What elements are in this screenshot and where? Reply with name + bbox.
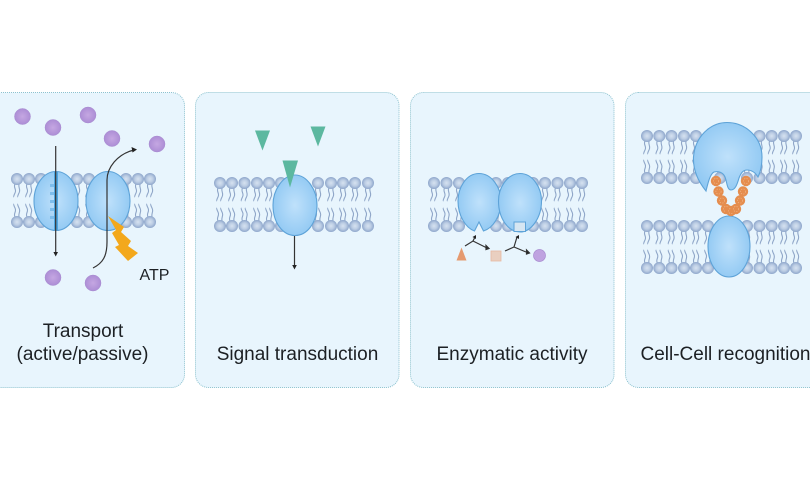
lipid bilayer: signal [214,177,374,232]
arrow: passive transport [53,146,58,256]
arrow: signal [292,236,297,270]
lipid bilayer: upper cell [641,130,802,184]
receptor: lower cell [708,216,750,277]
substrate triangle [456,248,466,260]
lipid bilayer: lower cell [641,220,802,274]
title: signal transduction: Signal transduction [217,344,378,365]
panel: cell-cell recognition [626,92,810,388]
title: transport: (active/passive) [16,344,148,365]
channel protein [34,172,78,230]
title: cell-cell recognition: Cell-Cell recognition [640,344,810,365]
ligands [255,126,326,188]
panel: signal transduction [196,92,399,388]
enzyme: right [498,174,542,232]
label: ATP: ATP [140,267,169,284]
panel: enzymatic activity [410,92,614,388]
receptor: upper cell [693,122,762,191]
title: transport: Transport [43,321,123,342]
carrier protein [86,172,130,230]
enzyme: left [458,174,501,231]
arrow: active transport [93,147,137,268]
reaction arrows: right [505,235,530,254]
molecules [14,107,165,291]
product circle [534,250,546,262]
reaction arrows: left [465,235,489,250]
icon: ATP lightning bolt [108,216,138,261]
lipid bilayer: transport [11,173,156,228]
panel: transport [0,92,184,388]
lipid bilayer: enzymatic [428,177,588,232]
receptor protein [273,175,317,236]
glycan chain [711,176,751,216]
title: enzymatic activity: Enzymatic activity [437,344,588,365]
product square [491,251,501,261]
